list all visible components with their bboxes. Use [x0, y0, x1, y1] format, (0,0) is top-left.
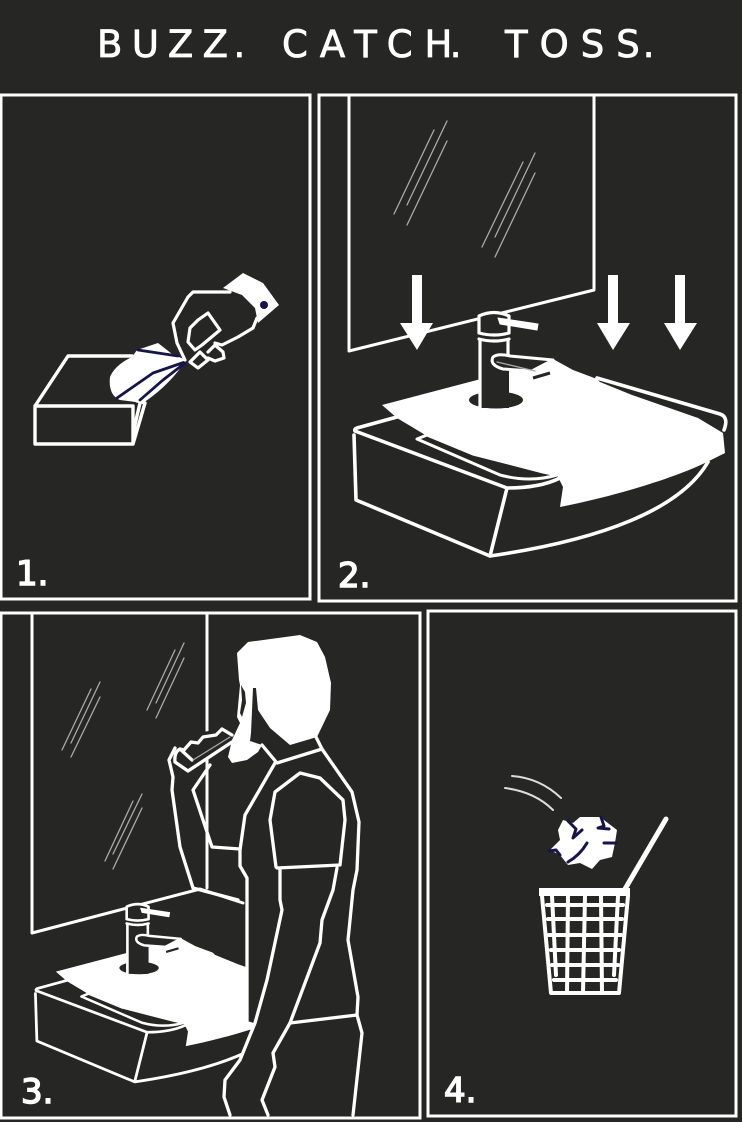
step number 3: 3. [21, 1072, 53, 1112]
panel 3: shave over the covered sink [1, 613, 420, 1118]
step number 2: 2. [338, 556, 370, 596]
title [97, 23, 666, 66]
mirror [32, 613, 243, 933]
motion lines [505, 776, 561, 810]
man: face line [240, 685, 246, 717]
icon: hand and cuff [173, 273, 279, 368]
mirror [349, 95, 594, 351]
faucet [119, 904, 181, 974]
crumpled paper ball [549, 817, 617, 869]
title: TOSS. [504, 23, 666, 66]
sink with paper cover [35, 904, 306, 1082]
man: body and arms [169, 735, 362, 1116]
arrows pointing down [400, 275, 697, 350]
step number 4: 4. [444, 1071, 476, 1111]
step number 1: 1. [16, 554, 48, 594]
title: BUZZ. [97, 23, 255, 66]
icon: tissue [110, 343, 186, 403]
panel 2: cover the sink [319, 95, 736, 601]
faucet [469, 312, 553, 408]
panel 1: buzz the tissue from the box [1, 95, 310, 599]
sink with paper cover [354, 312, 726, 556]
icon: tissue box [35, 356, 145, 444]
wire waste basket [539, 819, 666, 993]
panel 4: toss in the bin [428, 611, 736, 1116]
title: CATCH. [282, 23, 473, 66]
man: hair and beard [228, 635, 331, 763]
man: hand with razor [175, 729, 232, 771]
